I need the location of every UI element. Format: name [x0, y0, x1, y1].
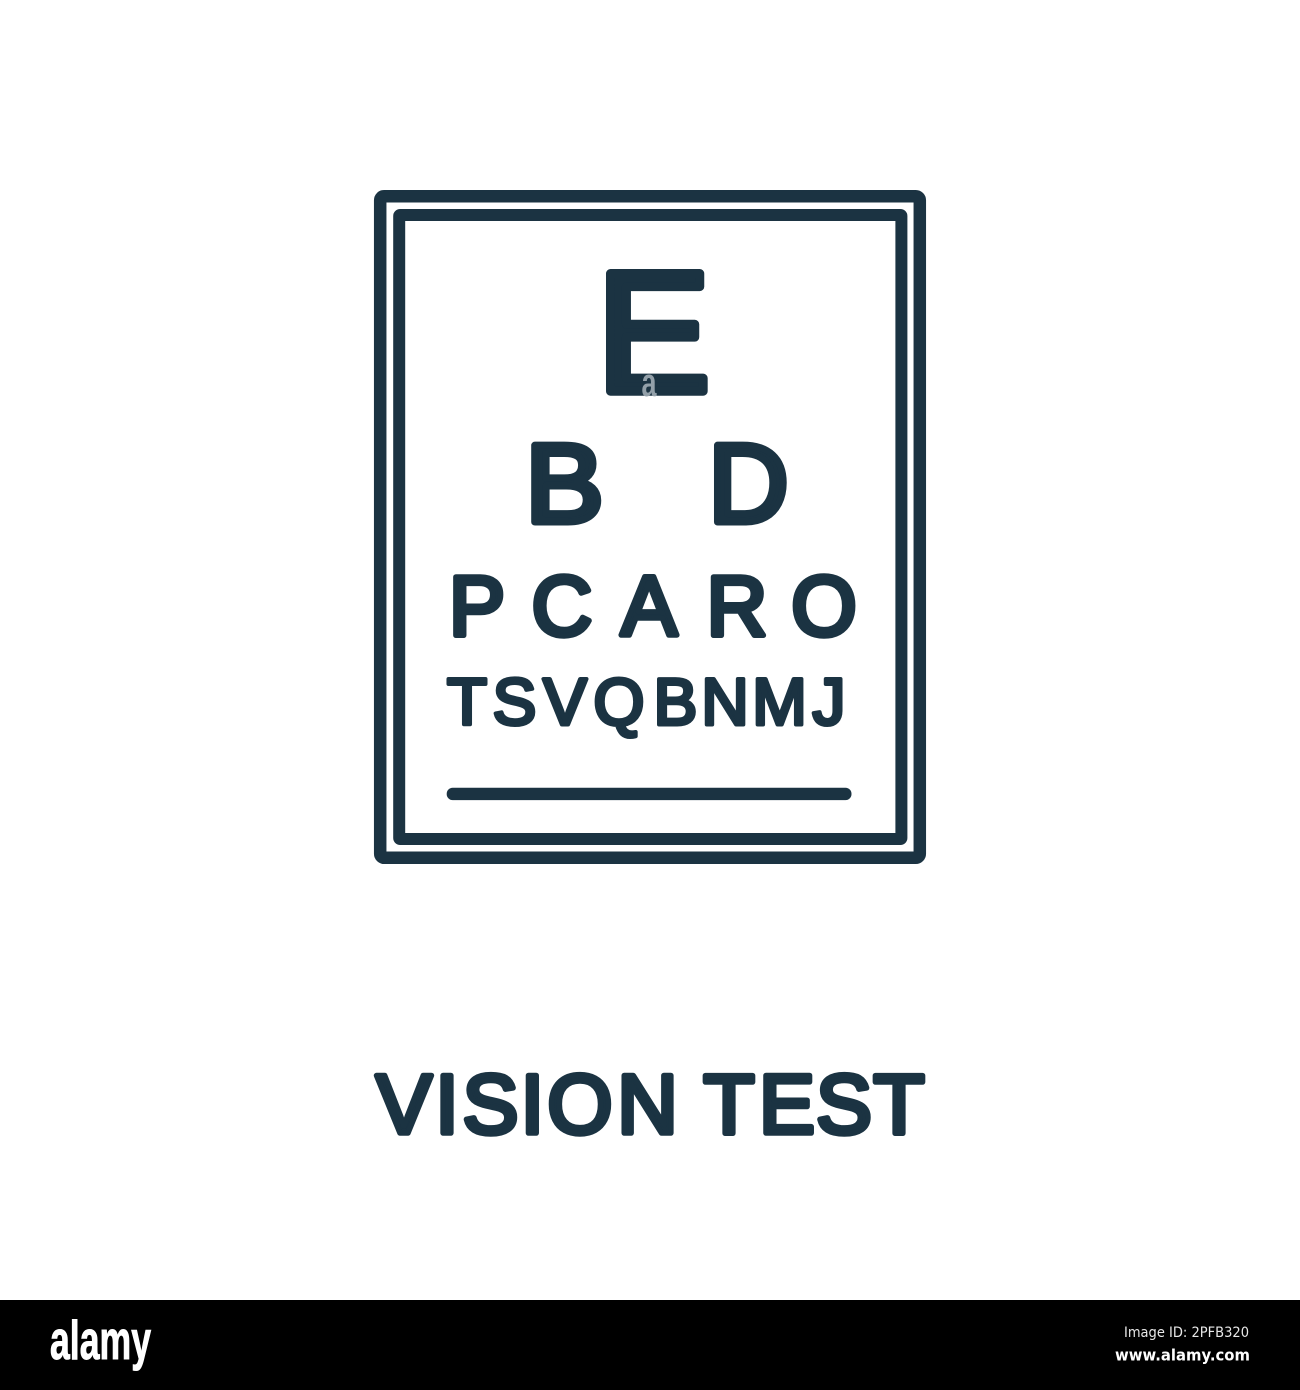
footer image id: Image ID: 2PFB320 — [1124, 1325, 1249, 1341]
title: VISIONTEST — [376, 1057, 925, 1151]
chart row 2: B D — [525, 422, 789, 546]
letter D: D — [708, 422, 789, 546]
chart baseline bar — [447, 788, 852, 800]
footer background — [0, 1300, 1300, 1390]
icon: eye chart — [380, 196, 920, 858]
footer website: www.alamy.com — [1115, 1346, 1250, 1364]
chart row 4: T S V Q B N M J: TSVQBNMJ — [447, 666, 845, 739]
chart outer frame — [380, 196, 920, 858]
footer bar — [0, 1300, 1300, 1390]
letter B: B — [525, 422, 604, 546]
chart row 3: P C A R O: PCARO — [449, 559, 857, 653]
chart inner frame — [399, 215, 901, 839]
watermark fragment in E: a — [642, 361, 657, 405]
footer logo: alamy — [50, 1309, 151, 1371]
chart row 1: E: E — [596, 237, 711, 428]
